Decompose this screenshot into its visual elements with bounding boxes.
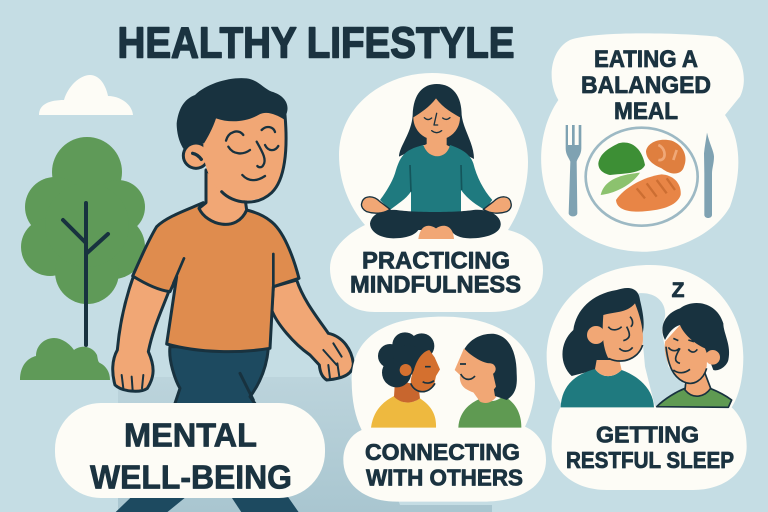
hair: [378, 332, 434, 387]
ear: [400, 364, 412, 376]
broccoli: [598, 143, 645, 175]
legs: [115, 347, 299, 512]
person left: [371, 396, 436, 428]
person left: face: [603, 303, 643, 360]
bubble: [343, 317, 546, 502]
face: [203, 110, 286, 200]
panel: getting restful sleep: [547, 265, 747, 490]
bubble: [541, 33, 744, 252]
hands: [361, 197, 390, 213]
person left: body: [561, 369, 654, 407]
bubble: [547, 265, 747, 490]
chicken: [616, 174, 681, 212]
legs: [370, 210, 501, 238]
label: mental well-being: WELL-BEING: [90, 458, 292, 496]
left arm: [113, 277, 169, 391]
panel: practicing mindfulness: MINDFULNESS: [350, 272, 521, 298]
plate: [586, 128, 698, 226]
leaf: [601, 173, 640, 195]
text: GETTING: [596, 422, 699, 448]
person right: [458, 396, 521, 428]
icon: fork: [566, 125, 581, 216]
facial features: [226, 127, 278, 180]
icon: cloud: [39, 75, 133, 115]
panel: getting restful sleep: RESTFUL SLEEP: [566, 447, 734, 473]
feet: [418, 226, 454, 239]
person right: [657, 388, 732, 407]
panel: eating a balanced meal: MEAL: [614, 98, 678, 125]
label: mental well-being: MENTAL: [124, 416, 257, 454]
sweater: [380, 145, 492, 213]
orange piece: [646, 140, 686, 174]
panel: connecting with others: [343, 317, 546, 502]
face: [411, 350, 440, 392]
panel: eating a balanced meal: [541, 33, 744, 252]
right arm: [272, 280, 353, 380]
icon: knife: [704, 133, 714, 218]
neck: [199, 170, 247, 224]
text: PRACTICING: [362, 248, 510, 274]
icon: z: Z: [672, 279, 685, 302]
meditating woman: [361, 84, 511, 239]
text: CONNECTING: [365, 439, 520, 465]
title: HEALTHY LIFESTYLE: [118, 18, 514, 68]
panel: practicing mindfulness: [330, 73, 543, 312]
panel: eating a balanced meal: BALANGED: [581, 72, 711, 99]
icon: bush: [20, 338, 110, 380]
person walking: [113, 78, 353, 512]
icon: tree: [21, 137, 145, 345]
hair: [177, 78, 288, 150]
shirt: [133, 203, 299, 352]
panel: connecting with others: WITH OTHERS: [366, 464, 523, 490]
neck: [423, 135, 450, 157]
face: [413, 98, 460, 140]
text: EATING A: [594, 46, 698, 73]
person left: hair: [562, 288, 644, 376]
label: mental well-being: [55, 403, 325, 498]
hair: [399, 84, 474, 159]
background gap: [638, 293, 687, 407]
ear: [183, 143, 209, 168]
